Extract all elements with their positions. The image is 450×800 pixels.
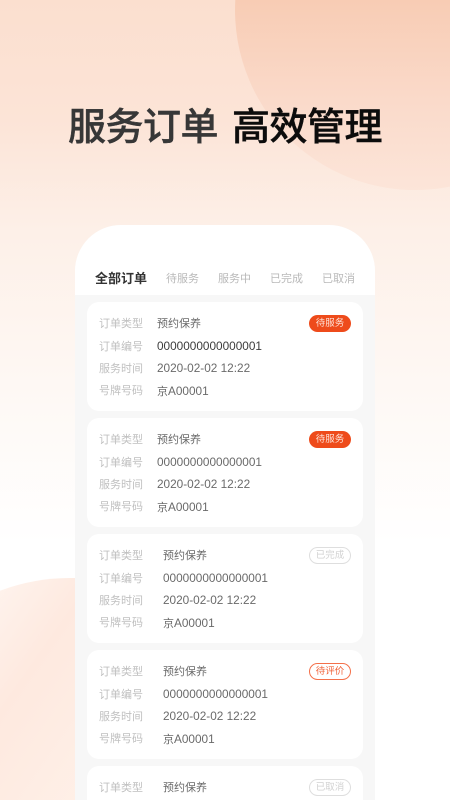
status badge: cancelled: 已取消 [316, 782, 344, 793]
order card 2: 0000000000000001 [157, 455, 262, 469]
order card 2: 订单类型 [99, 434, 143, 446]
order card 2: 订单编号 [99, 457, 143, 469]
title: 高效管理 [232, 96, 382, 151]
order card 2: 预约保养 [157, 434, 201, 446]
status badge: to be reviewed: 待评价 [316, 666, 344, 677]
order card 4: 订单编号 [99, 689, 143, 701]
title [68, 96, 382, 151]
order card 3: 2020-02-02 12:22 [163, 593, 256, 607]
top right circle [235, 0, 450, 190]
order card 3: 订单编号 [99, 573, 143, 585]
order card 4: 2020-02-02 12:22 [163, 709, 256, 723]
status badge: cancelled [309, 779, 351, 796]
tab: awaiting service: 待服务 [166, 273, 199, 285]
title: 服务订单 [68, 96, 218, 151]
order card 1: 订单编号 [99, 341, 143, 353]
order card 1 [87, 302, 363, 411]
order card 1: 2020-02-02 12:22 [157, 361, 250, 375]
order card 4: 0000000000000001 [163, 687, 268, 701]
order card 3: 京A00001 [163, 616, 215, 630]
status badge: to be reviewed [309, 663, 351, 680]
tab: in service: 服务中 [218, 273, 251, 285]
order card 5, cut off by page bottom: 预约保养 [163, 782, 207, 794]
order card 5, cut off by page bottom: 订单类型 [99, 782, 143, 794]
order card 3: 号牌号码 [99, 617, 143, 629]
order card 4: 预约保养 [163, 666, 207, 678]
order card 4: 订单类型 [99, 666, 143, 678]
order card 5, cut off by page bottom [87, 766, 363, 800]
status badge: awaiting service: 待服务 [316, 434, 344, 445]
status badge: awaiting service: 待服务 [316, 318, 344, 329]
order card 4: 京A00001 [163, 732, 215, 746]
order card 3: 订单类型 [99, 550, 143, 562]
order card 2: 京A00001 [157, 500, 209, 514]
order card 2: 2020-02-02 12:22 [157, 477, 250, 491]
order card 3: 服务时间 [99, 595, 143, 607]
tab bar [75, 225, 375, 295]
order card 3 [87, 534, 363, 643]
order card 1: 服务时间 [99, 363, 143, 375]
tab: cancelled: 已取消 [322, 273, 355, 285]
order card 2: 号牌号码 [99, 501, 143, 513]
status badge: awaiting service [309, 315, 351, 332]
bottom left circle [0, 578, 75, 800]
order card 4: 号牌号码 [99, 733, 143, 745]
status badge: awaiting service [309, 431, 351, 448]
order card 1: 0000000000000001 [157, 339, 262, 353]
order card 3: 预约保养 [163, 550, 207, 562]
tab: completed: 已完成 [270, 273, 303, 285]
panel: phone screen with order list [75, 225, 375, 800]
status badge: completed: 已完成 [316, 550, 344, 561]
order card 3: 0000000000000001 [163, 571, 268, 585]
order card 2: 服务时间 [99, 479, 143, 491]
order card 1: 订单类型 [99, 318, 143, 330]
order card 2 [87, 418, 363, 527]
tab: all orders, active: 全部订单 [95, 271, 147, 286]
order card 1: 号牌号码 [99, 385, 143, 397]
order card 1: 预约保养 [157, 318, 201, 330]
order card 4: 服务时间 [99, 711, 143, 723]
status badge: completed [309, 547, 351, 564]
order card 4 [87, 650, 363, 759]
order card 1: 京A00001 [157, 384, 209, 398]
